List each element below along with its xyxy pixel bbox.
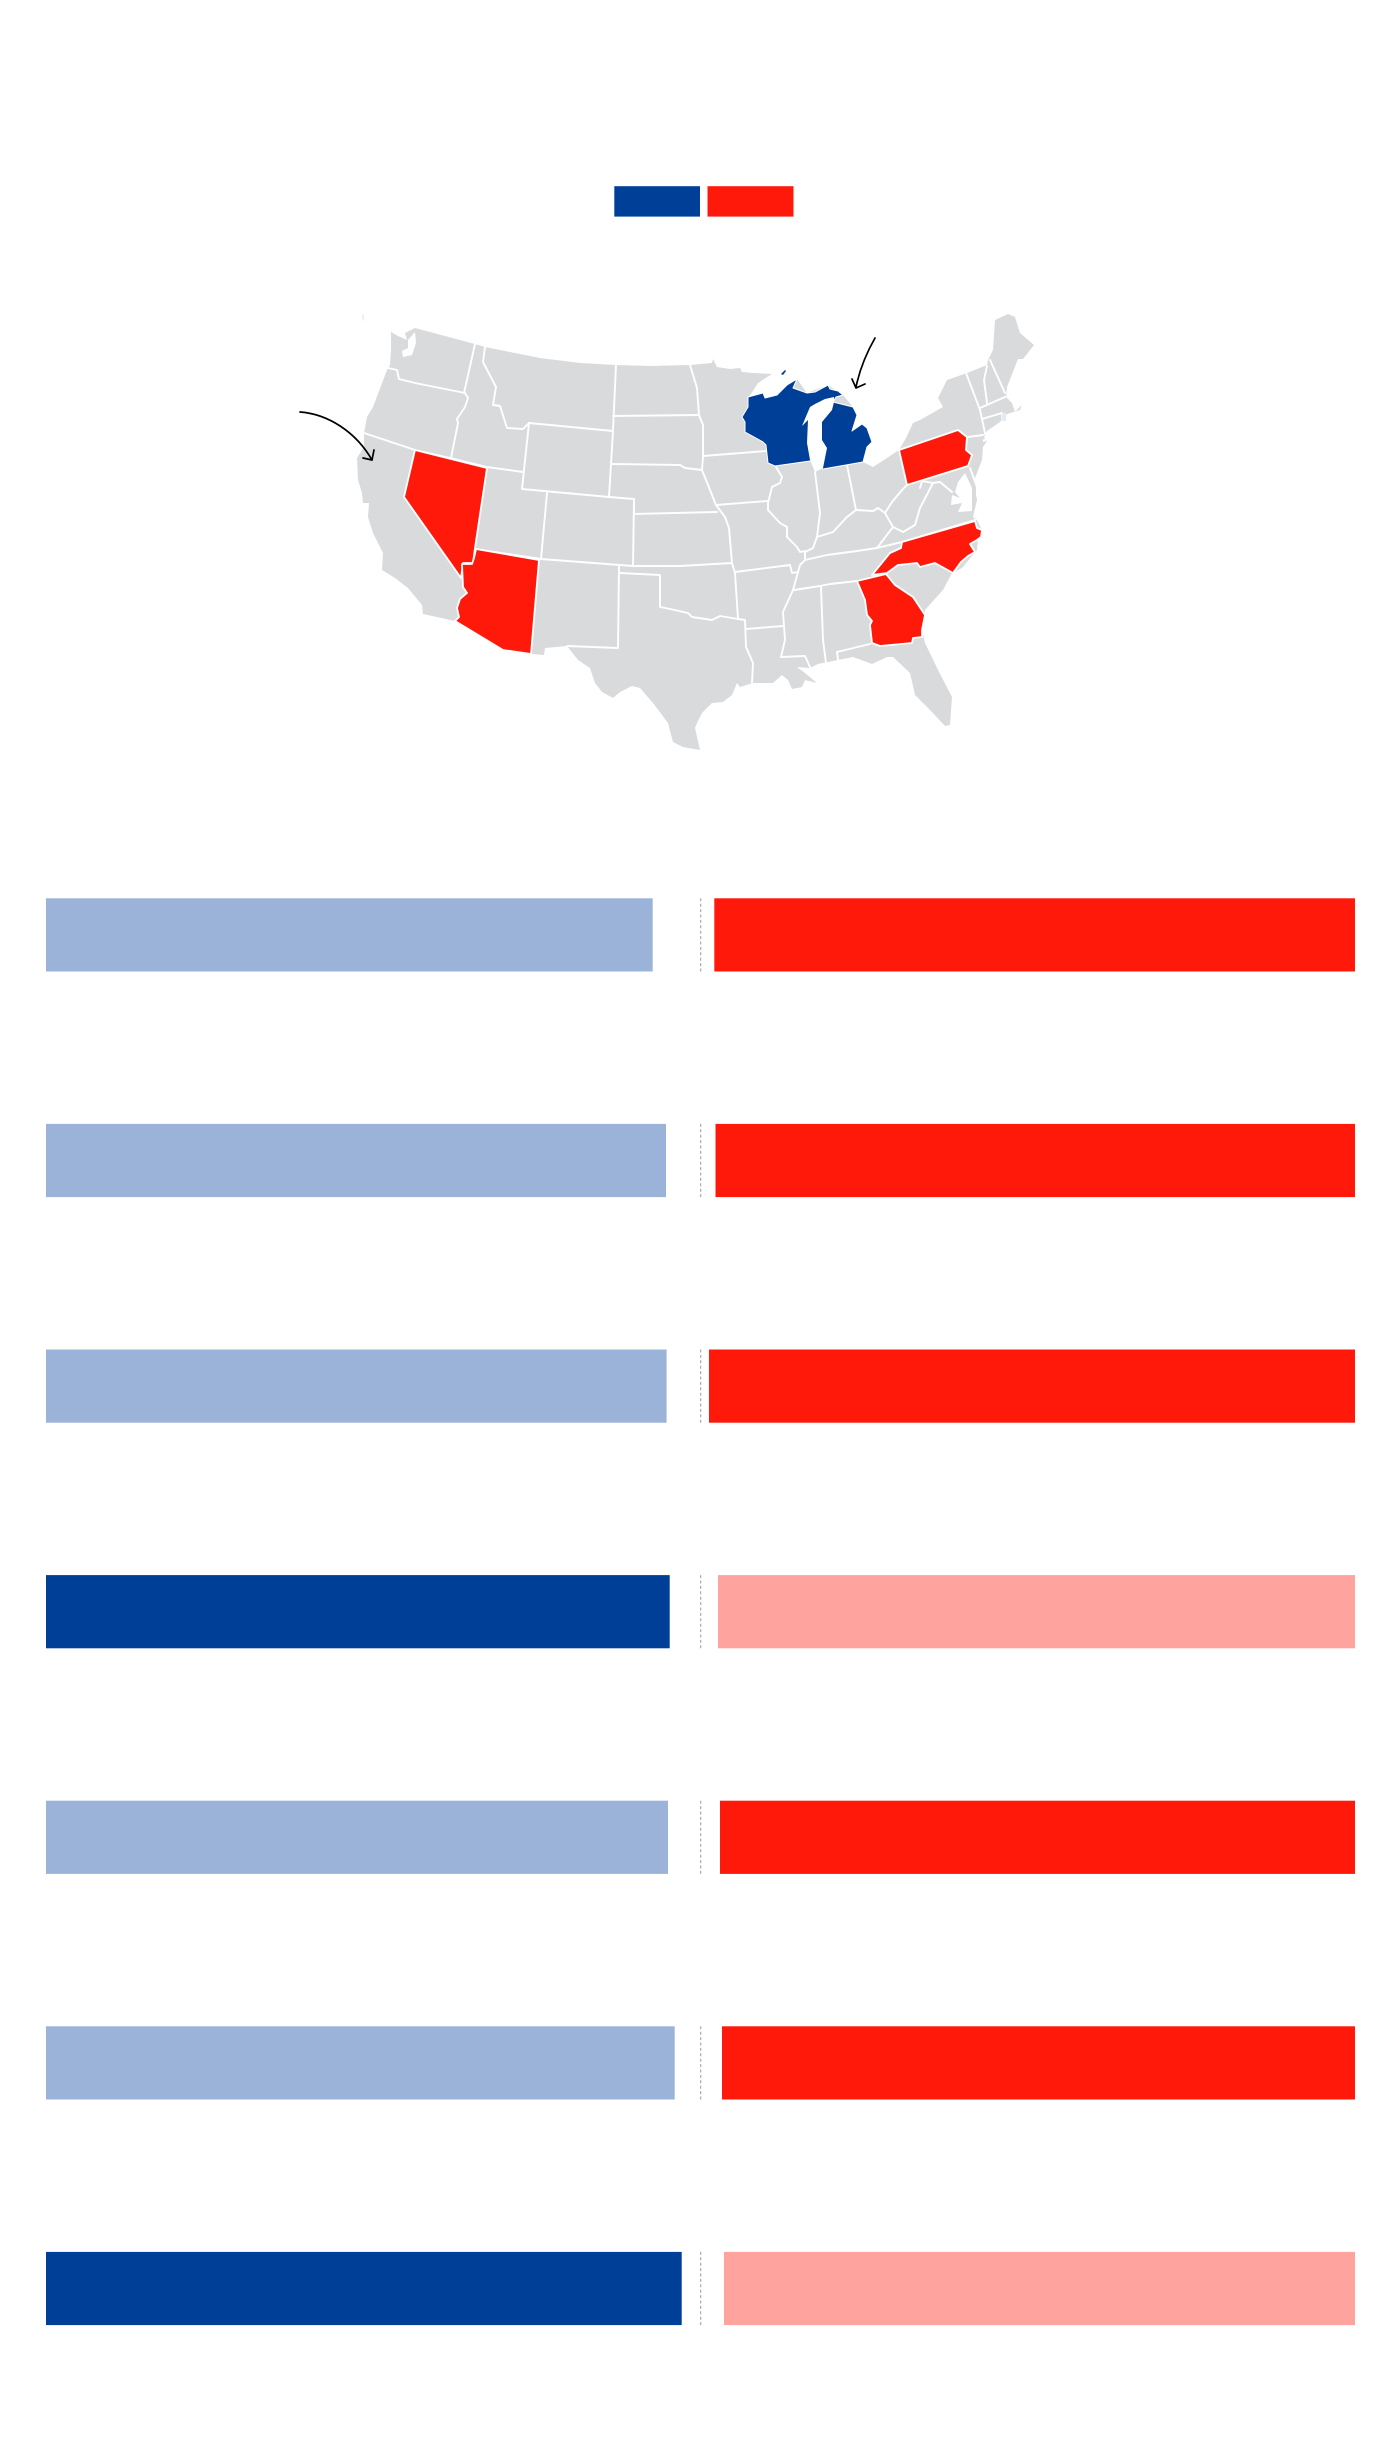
row 3 bars (46, 1350, 1355, 1423)
Lake Michigan cut (802, 397, 834, 472)
arrow: pointing to California (300, 412, 374, 460)
state: Georgia (857, 574, 925, 646)
state: Pennsylvania (899, 430, 972, 485)
state borders (364, 344, 1005, 683)
legend (614, 186, 794, 217)
Isle Royale (781, 370, 786, 375)
long island sound cut (983, 432, 1000, 441)
row 6 bars (46, 2026, 1355, 2100)
states: Wisconsin and Michigan (742, 370, 872, 472)
puget sound cut (402, 332, 416, 357)
stray map speck (362, 314, 364, 320)
Wisconsin and Michigan fill (742, 379, 872, 469)
bar rows (46, 898, 1355, 2325)
legend swatch: red (708, 186, 794, 217)
row 2 bars (46, 1124, 1355, 1197)
state: North Carolina (872, 521, 982, 575)
arrow: pointing to Michigan (852, 338, 875, 388)
legend swatch: blue (614, 186, 700, 217)
row 1 bars (46, 898, 1355, 972)
state: Arizona (455, 549, 539, 654)
map: base silhouette (357, 314, 1034, 750)
row 4 bars (46, 1575, 1355, 1648)
map of the United States (300, 314, 1034, 750)
rhode island speck (1002, 413, 1006, 421)
state: Nevada (404, 450, 487, 578)
row 7 bars (46, 2252, 1355, 2325)
chesapeake bay cut (951, 473, 972, 512)
row 5 bars (46, 1801, 1355, 1874)
